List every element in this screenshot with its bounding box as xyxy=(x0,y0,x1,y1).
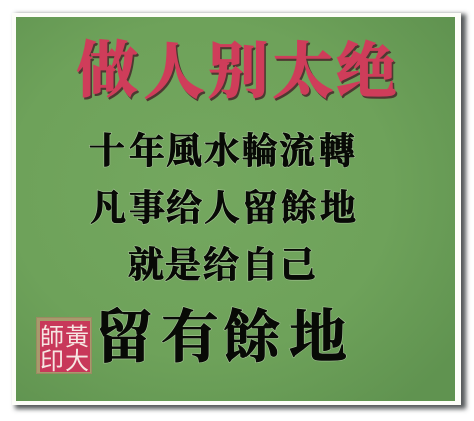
closing line: 留 xyxy=(95,305,153,370)
text line 1 xyxy=(89,131,355,171)
text line 2: 留 xyxy=(242,188,278,228)
red seal: 黃 xyxy=(65,324,89,351)
text line 3: 给 xyxy=(203,245,239,285)
title xyxy=(76,38,398,109)
text line 3: 给 xyxy=(203,245,239,285)
title: 别 xyxy=(209,41,270,108)
closing line: 餘 xyxy=(223,305,283,370)
title: 绝 xyxy=(337,41,398,108)
text line 2: 人 xyxy=(204,188,240,228)
text line 1: 流 xyxy=(279,131,316,171)
title: 人 xyxy=(145,42,206,109)
text line 3: 是 xyxy=(165,245,201,285)
text line 2: 事 xyxy=(129,188,165,228)
title: 人 xyxy=(143,40,205,107)
closing line xyxy=(95,305,347,370)
text line 3: 就 xyxy=(128,245,164,285)
text line 3: 自 xyxy=(242,245,278,285)
title: 做 xyxy=(78,40,139,107)
text line 1: 年 xyxy=(129,131,165,171)
red seal xyxy=(36,318,92,375)
text line 2: 给 xyxy=(166,188,202,228)
closing line: 有 xyxy=(161,305,219,370)
red seal: 印 xyxy=(40,348,64,375)
text line 2: 餘 xyxy=(281,188,318,228)
closing line: 地 xyxy=(289,305,347,370)
text line 1: 輪 xyxy=(242,131,278,171)
text line 2: 地 xyxy=(320,188,356,228)
title: 做 xyxy=(76,38,138,105)
text line 2: 留 xyxy=(242,188,278,228)
text line 2: 人 xyxy=(204,188,240,228)
text line 1: 轉 xyxy=(319,131,355,171)
text line 3: 自 xyxy=(242,245,278,285)
text line 1: 年 xyxy=(129,131,165,171)
closing line: 餘 xyxy=(223,305,283,370)
text line 2: 凡 xyxy=(90,188,126,228)
text line 1: 十 xyxy=(89,131,125,171)
text line 1: 流 xyxy=(279,131,316,171)
text line 1: 十 xyxy=(89,131,125,171)
red seal: 大 xyxy=(65,348,89,375)
text line 3: 是 xyxy=(165,245,201,285)
text line 3: 己 xyxy=(280,245,316,285)
title: 太 xyxy=(272,39,334,106)
text line 2: 地 xyxy=(320,188,356,228)
text line 1: 風 xyxy=(166,131,202,171)
text line 3 xyxy=(128,245,316,285)
closing line: 地 xyxy=(289,305,347,370)
text line 2 xyxy=(90,188,356,228)
text line 2: 凡 xyxy=(90,188,126,228)
text line 3: 就 xyxy=(128,245,164,285)
closing line: 留 xyxy=(95,305,153,370)
text line 1: 輪 xyxy=(242,131,278,171)
text line 1: 風 xyxy=(166,131,202,171)
red seal: 師 xyxy=(40,324,64,351)
text line 1: 轉 xyxy=(319,131,355,171)
text line 2: 事 xyxy=(129,188,165,228)
title: 别 xyxy=(207,39,269,106)
closing line: 有 xyxy=(161,305,219,370)
text line 1: 水 xyxy=(204,131,240,171)
text line 3: 己 xyxy=(280,245,316,285)
text line 1: 水 xyxy=(204,131,240,171)
text line 2: 餘 xyxy=(281,188,318,228)
text line 2: 给 xyxy=(166,188,202,228)
title: 绝 xyxy=(335,39,397,106)
title: 太 xyxy=(274,41,335,108)
